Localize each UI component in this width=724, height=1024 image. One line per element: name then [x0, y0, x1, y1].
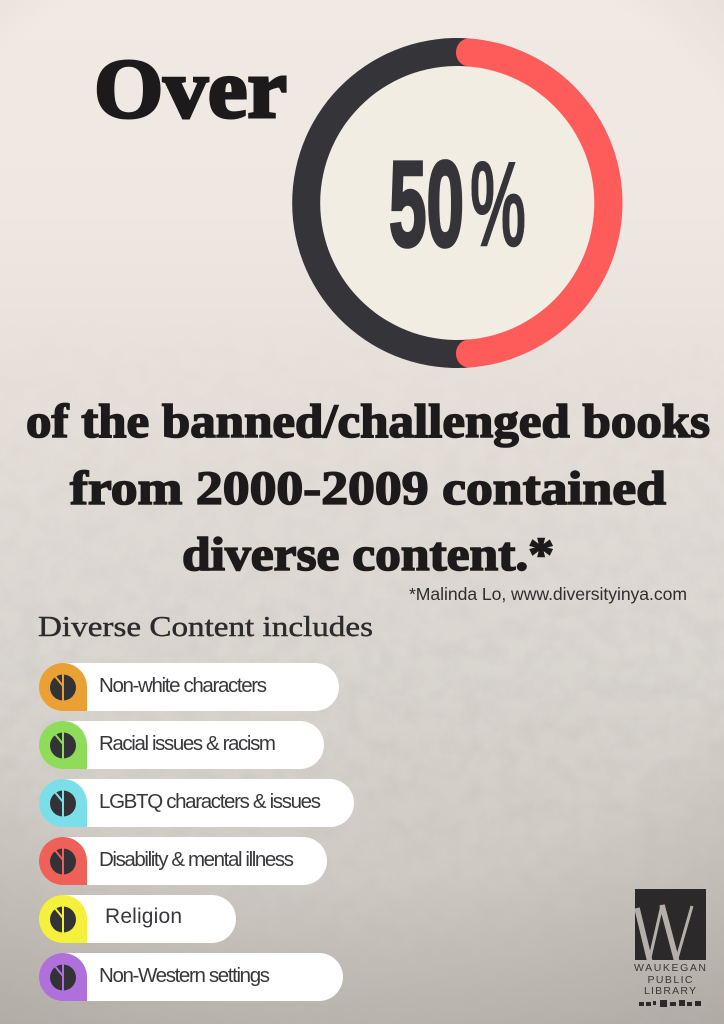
icon: cyan badge [39, 779, 87, 827]
line 1: of the banned/challenged books [26, 395, 710, 448]
subheading: Diverse Content includes [38, 611, 373, 643]
logo mark [635, 889, 706, 962]
list item: Disability & mental illness [39, 837, 327, 885]
line 2: from 2000-2009 contained [70, 462, 666, 515]
inner disc [317, 63, 597, 343]
icon: orange badge [39, 663, 87, 711]
list item: Racial issues & racism: Racial issues & racism [99, 732, 276, 755]
list item: Racial issues & racism [39, 721, 324, 769]
list item: LGBTQ characters & issues [39, 779, 354, 827]
donut chart: 50% [292, 38, 623, 368]
logo squares [639, 1000, 701, 1007]
source citation: *Malinda Lo, www.diversityinya.com [409, 584, 687, 604]
value label: % [470, 136, 526, 272]
logo wordmark: WAUKEGAN [634, 962, 706, 974]
list item: Non-Western settings [39, 953, 343, 1001]
logo wordmark [634, 962, 706, 997]
list item: Religion: Religion [105, 905, 182, 928]
icon: yellow badge [39, 895, 87, 943]
dark ring segment [292, 38, 470, 368]
icon: red badge [39, 837, 87, 885]
list item: Non-white characters [39, 663, 339, 711]
list item: Non-white characters: Non-white characters [99, 674, 267, 697]
icon: purple badge [39, 953, 87, 1001]
logo wordmark: LIBRARY [644, 985, 696, 997]
line 3: diverse content.* [182, 528, 554, 581]
icon: green badge [39, 721, 87, 769]
logo wordmark: PUBLIC [648, 974, 693, 986]
list item: Non-Western settings: Non-Western settings [99, 964, 270, 987]
heading: Over: Over [94, 42, 287, 136]
list item: Religion [39, 895, 236, 943]
logo: Waukegan Public Library [634, 889, 706, 1007]
list item: LGBTQ characters & issues: LGBTQ characters & issues [99, 790, 321, 813]
red ring segment [456, 38, 623, 368]
headline statement [26, 395, 710, 581]
value label: 50 [389, 136, 464, 272]
list item: Disability & mental illness: Disability & mental illness [99, 848, 294, 871]
